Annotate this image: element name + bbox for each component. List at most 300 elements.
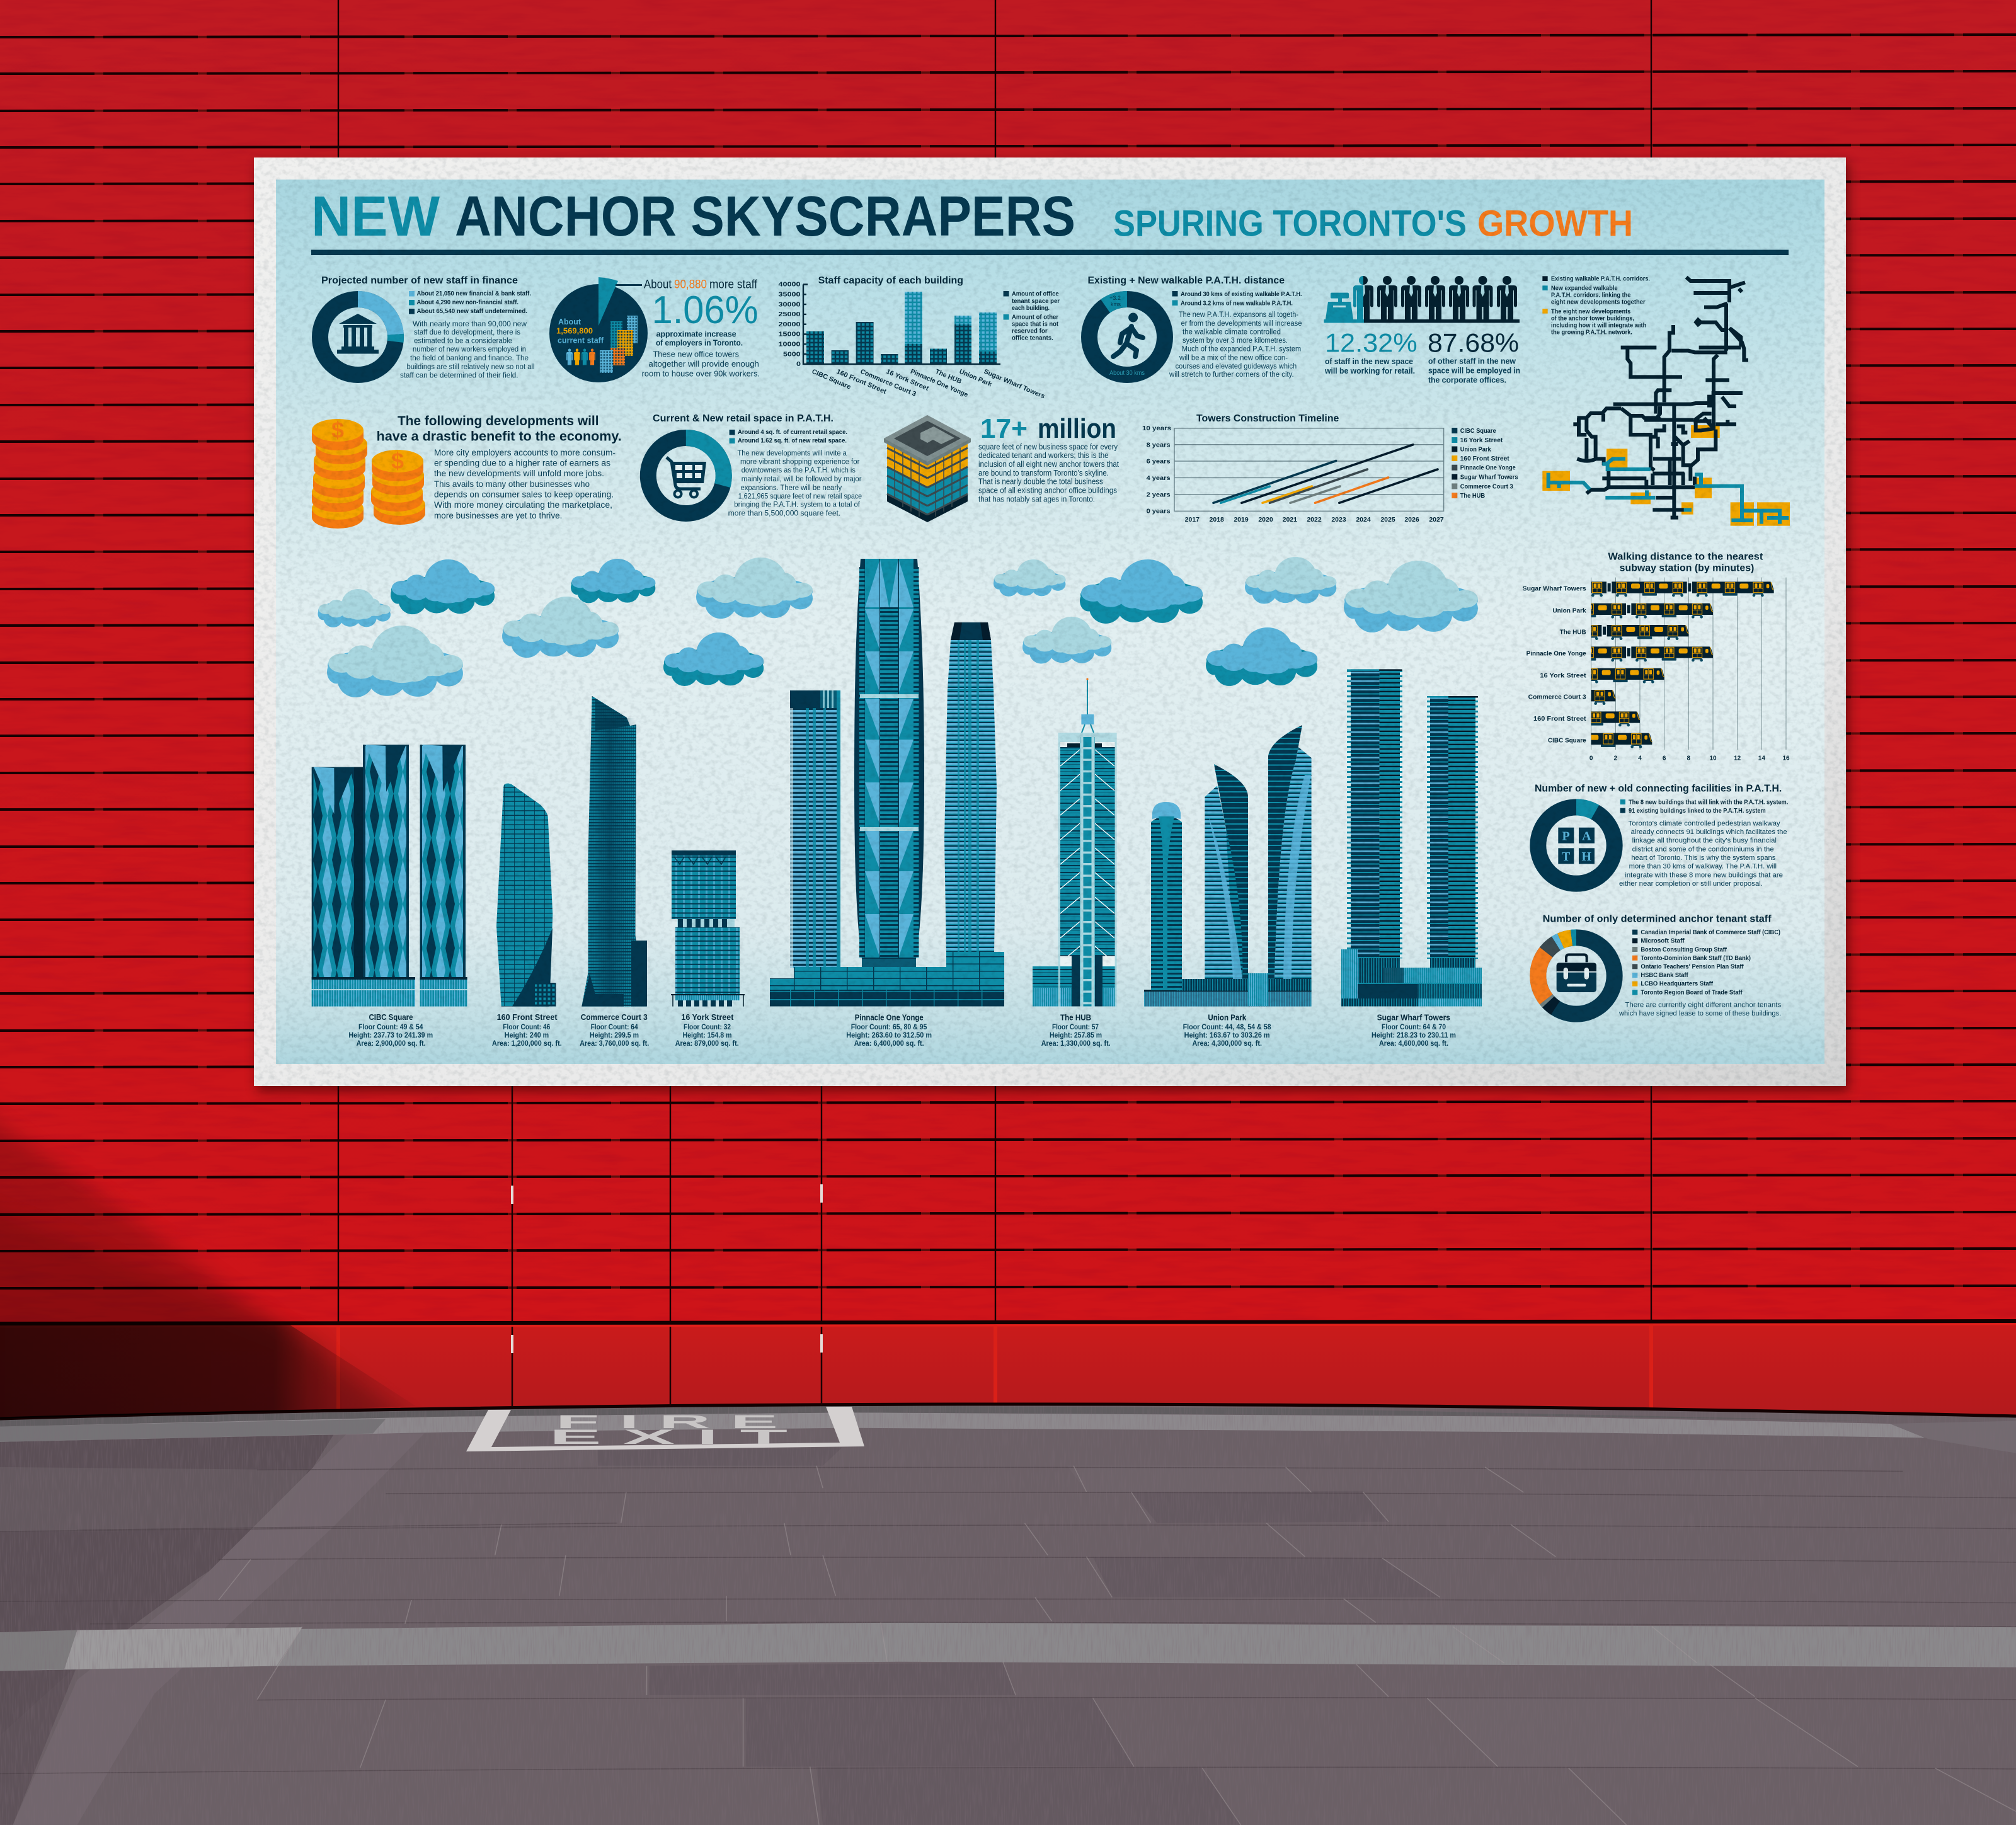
- callout: more staff: About: [644, 278, 672, 291]
- heading: connecting facilities: Number of new + old connecting facilities in P.A.T.H.: [1535, 784, 1782, 794]
- panel: walkable PATH distance: kms: [1111, 301, 1121, 307]
- row labels: Sugar Wharf Towers: [1523, 586, 1586, 593]
- legend: walkable: [1172, 290, 1302, 307]
- legend: capacity: space that is not: [1012, 321, 1059, 328]
- caption: Union Park: Height: 163.67 to 303.26 m: [1184, 1031, 1270, 1039]
- x axis labels: 2022: [1307, 516, 1322, 523]
- panel: retail vs corporate staff: [1324, 276, 1520, 385]
- caption: Pinnacle One Yonge: Area: 6,400,000 sq. ft.: [854, 1039, 924, 1048]
- bars: [806, 292, 997, 363]
- axis labels: 20000: [779, 321, 801, 328]
- axis labels: 15000: [779, 331, 801, 338]
- x axis labels: 6: [1663, 755, 1666, 762]
- tower: Sugar Wharf Towers: [1341, 669, 1482, 1007]
- text block: walkable: system by over 3 more kilometres.: [1183, 337, 1288, 345]
- left tower: [1347, 669, 1402, 958]
- panel: economy benefit: [312, 414, 622, 529]
- text block: retail: [728, 450, 862, 518]
- tower: Commerce Court 3: [581, 696, 647, 1007]
- heading: capacity: Staff capacity of each building: [818, 275, 963, 286]
- caption: CIBC Square: Floor Count: 49 & 54: [358, 1022, 423, 1031]
- caption: 160 Front Street: Area: 1,200,000 sq. ft.: [492, 1039, 562, 1048]
- text block: business space: square feet of new business space for every: [978, 442, 1118, 451]
- clouds: [318, 557, 1478, 697]
- legend: retail: Around 4 sq. ft. of current retail space.: [738, 428, 847, 436]
- icon: coin stacks: $: [331, 417, 344, 443]
- stat: 87.68%: 87.68%: [1428, 328, 1519, 358]
- label: current staff: 1,569,800: [556, 326, 593, 335]
- text block: PATH: linkage all throughout the city's busy financial: [1632, 837, 1777, 845]
- panel: 1.06% employer increase: These new office towers: [653, 350, 739, 359]
- text block: PATH: [1619, 820, 1787, 888]
- title: NEW: [311, 185, 440, 248]
- text block: walkable: will be a mix of the new office con-: [1179, 354, 1288, 362]
- caption: Pinnacle One Yonge: Pinnacle One Yonge: [855, 1012, 924, 1022]
- poster paper border: [254, 157, 1846, 1086]
- x axis labels: 2026: [1404, 516, 1419, 523]
- caption: Sugar Wharf Towers: [1372, 1013, 1456, 1048]
- heading: projected staff: Projected number of new staff in finance: [321, 275, 518, 286]
- row labels: 16 York Street: [1540, 672, 1587, 679]
- rotated building labels: Pinnacle One Yonge: [909, 368, 969, 399]
- text block: economy: depends on consumer sales to keep operating.: [434, 490, 614, 500]
- x axis labels: 2025: [1380, 516, 1395, 523]
- axis labels: 40000: [779, 282, 801, 289]
- text block: retail: The new developments will invite a: [737, 450, 847, 457]
- rotated building labels: Union Park: [958, 368, 993, 388]
- caption: The HUB: Height: 257.85 m: [1050, 1031, 1102, 1039]
- caption: CIBC Square: CIBC Square: [369, 1012, 413, 1022]
- x axis labels: 8: [1687, 755, 1691, 762]
- x axis labels: 2020: [1258, 516, 1273, 523]
- text block: finance: the field of banking and finance. The: [410, 355, 529, 362]
- right tower: [1268, 725, 1312, 979]
- caption: 16 York Street: Height: 154.8 m: [683, 1031, 732, 1039]
- caption: Commerce Court 3: Commerce Court 3: [581, 1012, 648, 1022]
- legend: connecting facilities: The 8 new buildings that will link with the P.A.T.H. system.: [1629, 799, 1789, 806]
- legend: walkable: Around 30 kms of existing walkable P.A.T.H.: [1181, 290, 1302, 298]
- caption: Sugar Wharf Towers: Floor Count: 64 & 70: [1382, 1022, 1446, 1031]
- podium: [770, 952, 1004, 1007]
- timeline lines: [1213, 445, 1438, 503]
- text block: finance: number of new workers employed in: [413, 346, 526, 353]
- x axis labels: 2018: [1210, 516, 1224, 523]
- row labels: Union Park: [1552, 607, 1586, 614]
- donut: retail: [648, 438, 724, 513]
- text block: retail: expansions. There will be nearly: [741, 484, 842, 492]
- legend: map: New expanded walkable: [1551, 285, 1618, 292]
- legend: finance staff: About 4,290 new non-financial staff.: [417, 299, 518, 306]
- heading: walkable: Existing + New walkable P.A.T.H. distance: [1087, 275, 1285, 286]
- text block: retail: mainly retail, will be followed by major: [742, 476, 862, 483]
- x axis labels: 2024: [1356, 516, 1371, 523]
- icon: isometric office building: [884, 415, 971, 522]
- heading: economy: have a drastic benefit to the economy.: [377, 430, 622, 443]
- chart: walking distance trains: [1433, 551, 1790, 762]
- x axis labels: 10: [1709, 755, 1717, 762]
- text block: PATH: heart of Toronto. This is why the system spans: [1631, 854, 1776, 862]
- legend: walkable: Around 3.2 kms of new walkable P.A.T.H.: [1181, 299, 1293, 307]
- text block: PATH: district and some of the condominiums in the: [1632, 845, 1774, 853]
- legend: finance staff: About 65,540 new staff undetermined.: [417, 307, 527, 315]
- rotated building labels: [811, 368, 1046, 400]
- bar chart: staff capacity: [779, 275, 1060, 400]
- fire exit floor marking: [466, 1407, 864, 1451]
- x axis labels: [1589, 755, 1790, 762]
- fire exit floor marking: E X I T: [549, 1426, 789, 1448]
- captions: staff split: [1324, 357, 1520, 385]
- callout: more staff: more staff: [709, 278, 758, 291]
- text block: employers: approximate increase: [656, 329, 736, 339]
- label: current staff: About: [558, 317, 581, 326]
- icon: PATH blocks: [1558, 828, 1595, 864]
- legend: timeline: Union Park: [1460, 446, 1491, 454]
- caption: Union Park: Area: 4,300,000 sq. ft.: [1192, 1039, 1262, 1048]
- legend: capacity: Amount of office: [1012, 291, 1059, 298]
- caption: 160 Front Street: [492, 1012, 562, 1048]
- panel: 17+ million: [884, 413, 1119, 522]
- text block: anchor tenants: [1618, 1002, 1782, 1017]
- pie: current staff: [549, 284, 648, 382]
- tower: 160 Front Street: [496, 784, 556, 1007]
- icon: bank: [337, 314, 379, 354]
- donut: connecting facilities: [1538, 807, 1615, 884]
- heading: economy: [377, 414, 622, 443]
- donut: walkable distance: [1074, 284, 1180, 390]
- podium: [1341, 949, 1482, 1007]
- heading: walking distance: Walking distance to the nearest: [1608, 551, 1763, 562]
- centre tower: [854, 559, 924, 968]
- label: current staff: [556, 317, 604, 345]
- legend: map: The eight new developments: [1551, 308, 1631, 315]
- captions: staff split: of staff in the new space: [1325, 357, 1413, 366]
- callout: more staff: 90,880: [674, 278, 707, 291]
- legend: anchor tenants: Canadian Imperial Bank of Commerce Staff (CIBC): [1641, 929, 1780, 936]
- legend: capacity: Amount of other: [1012, 314, 1058, 321]
- text block: anchor tenants: There are currently eight different anchor tenants: [1625, 1002, 1782, 1009]
- text block: business space: space of all existing anchor office buildings: [978, 486, 1117, 495]
- panel: PATH map: [1542, 276, 1790, 526]
- x axis labels: 4: [1638, 755, 1642, 762]
- heading: walking distance: [1608, 551, 1763, 574]
- poster drop shadow: [257, 163, 1848, 1091]
- text block: walkable: Much of the expanded P.A.T.H. system: [1182, 345, 1301, 353]
- text block: PATH: already connects 91 buildings which facilitates the: [1631, 828, 1787, 836]
- donut: anchor tenants: [1522, 922, 1630, 1030]
- rotated building labels: Sugar Wharf Towers: [983, 368, 1046, 400]
- text block: walkable: [1169, 311, 1302, 379]
- caption: Sugar Wharf Towers: Area: 4,600,000 sq. ft.: [1379, 1039, 1448, 1048]
- panel: 1.06% employer increase: room to house over 90k workers.: [642, 369, 760, 378]
- legend: timeline: [1452, 428, 1518, 500]
- axis labels: 35000: [779, 291, 801, 299]
- axis labels: 25000: [779, 311, 801, 318]
- icon: briefcase: [1557, 954, 1596, 992]
- row labels: The HUB: [1560, 629, 1586, 636]
- text block: finance: With nearly more than 90,000 new: [413, 321, 527, 328]
- poster: [254, 157, 1846, 1086]
- rotated building labels: Commerce Court 3: [859, 368, 917, 398]
- subtitle: SPURING TORONTO'S: [1113, 203, 1467, 244]
- legend: anchor tenants: HSBC Bank Staff: [1641, 972, 1688, 979]
- caption: 16 York Street: [675, 1012, 739, 1048]
- caption: Union Park: [1183, 1013, 1271, 1048]
- y axis labels: 4 years: [1147, 474, 1171, 482]
- legend: timeline: 16 York Street: [1460, 437, 1503, 444]
- text block: business space: inclusion of all eight new anchor towers that: [978, 460, 1119, 469]
- left tower: [1151, 802, 1182, 990]
- legend: map: eight new developments together: [1551, 299, 1646, 306]
- caption: Commerce Court 3: Area: 3,760,000 sq. ft.: [580, 1039, 649, 1048]
- x axis labels: 0: [1589, 755, 1593, 762]
- text block: retail: bringing the P.A.T.H. system to a total of: [734, 501, 861, 509]
- x axis labels: 2021: [1283, 516, 1297, 523]
- legend: capacity: tenant space per: [1012, 298, 1060, 305]
- legend: finance staff: About 21,050 new financial & bank staff.: [417, 290, 531, 297]
- legend: anchor tenants: [1632, 929, 1780, 997]
- heading: timeline: Towers Construction Timeline: [1196, 413, 1339, 424]
- panel: connecting facilities and anchor tenants: [1522, 784, 1789, 1030]
- legend: timeline: Pinnacle One Yonge: [1460, 465, 1516, 472]
- tower captions: [348, 1012, 1456, 1048]
- x axis labels: 2023: [1331, 516, 1346, 523]
- label: current staff: current staff: [558, 335, 604, 345]
- tower: CIBC Square: [312, 745, 467, 1007]
- legend: capacity: reserved for: [1012, 328, 1048, 335]
- icon: PATH blocks: T: [1562, 850, 1571, 864]
- panel: retail space: [648, 413, 862, 518]
- panel: walkable PATH distance: About 30 kms: [1109, 370, 1145, 377]
- rotated building labels: The HUB: [934, 368, 963, 386]
- legend: timeline: CIBC Square: [1460, 428, 1496, 435]
- map: new development sites: [1542, 425, 1790, 526]
- chart: construction timeline: [1142, 413, 1518, 523]
- captions: staff split: space will be employed in: [1428, 367, 1520, 375]
- legend: capacity: office tenants.: [1012, 335, 1053, 342]
- x axis labels: 2019: [1234, 516, 1249, 523]
- caption: Sugar Wharf Towers: Height: 218.23 to 230.11 m: [1372, 1031, 1456, 1039]
- tower: The HUB: [1033, 678, 1117, 1007]
- text block: retail: more vibrant shopping experience for: [740, 459, 860, 466]
- text block: economy: This avails to many other businesses who: [434, 479, 590, 489]
- legend: capacity: each building.: [1012, 305, 1050, 312]
- legend: anchor tenants: Toronto-Dominion Bank Staff (TD Bank): [1641, 955, 1751, 962]
- panel: 1.06% employer increase: altogether will provide enough: [649, 359, 759, 369]
- icon: city and people: [566, 316, 638, 373]
- x axis labels: 2027: [1429, 516, 1444, 523]
- heading: anchor tenant staff: Number of only determined anchor tenant staff: [1543, 913, 1772, 924]
- text block: economy: [434, 448, 616, 520]
- icon: PATH blocks: P: [1562, 829, 1570, 843]
- caption: Commerce Court 3: Height: 299.5 m: [590, 1031, 639, 1039]
- caption: Pinnacle One Yonge: Height: 263.60 to 312.50 m: [846, 1031, 932, 1039]
- icon: coin stacks: [312, 417, 425, 529]
- legend: retail: [730, 428, 847, 445]
- caption: Sugar Wharf Towers: Sugar Wharf Towers: [1377, 1013, 1450, 1022]
- stat: 17+ million: 17+: [980, 413, 1028, 444]
- icon: PATH blocks: A: [1582, 829, 1591, 843]
- callout: more staff: [644, 278, 758, 291]
- x axis labels: 2: [1614, 755, 1618, 762]
- legend: anchor tenants: Boston Consulting Group Staff: [1641, 946, 1727, 953]
- caption: The HUB: Floor Count: 57: [1052, 1022, 1099, 1031]
- x axis labels: 16: [1782, 755, 1790, 762]
- row labels: CIBC Square: [1548, 737, 1586, 744]
- captions: staff split: of other staff in the new: [1428, 357, 1516, 365]
- icon: walking person: [1113, 312, 1143, 357]
- map: new corridors: [1549, 459, 1789, 524]
- y axis labels: [1142, 425, 1171, 515]
- captions: staff split: will be working for retail.: [1324, 367, 1415, 375]
- heading: retail: Current & New retail space in P.A.T.H.: [653, 413, 833, 424]
- stat: 1.06%: 1.06%: [652, 289, 759, 332]
- text block: economy: More city employers accounts to more consum-: [434, 448, 616, 457]
- text block: retail: downtowners as the P.A.T.H. which is: [742, 467, 856, 474]
- text block: business space: that has notably sat ages in Toronto.: [978, 495, 1095, 503]
- y axis labels: 8 years: [1147, 441, 1171, 449]
- donut: finance staff: [318, 297, 398, 377]
- legend: map: of the anchor tower buildings,: [1551, 315, 1634, 322]
- rotated building labels: CIBC Square: [811, 368, 852, 391]
- right tower: [944, 622, 997, 952]
- axis labels: 0: [796, 361, 801, 368]
- legend: map: P.A.T.H. corridors. linking the: [1551, 292, 1631, 299]
- background: pavement: [0, 1399, 2016, 1825]
- text block: walkable: The new P.A.T.H. expansons all togeth-: [1179, 311, 1298, 319]
- legend: connecting facilities: [1620, 799, 1789, 815]
- text block: PATH: either near completion or still under proposal.: [1619, 880, 1763, 888]
- grid: [1591, 578, 1786, 750]
- text block: walkable: the walkable climate controlled: [1183, 329, 1281, 336]
- axis labels: 10000: [779, 341, 801, 348]
- legend: finance staff: [409, 290, 531, 315]
- poster blue field: [276, 180, 1824, 1064]
- fire exit floor marking: F I R E: [556, 1412, 778, 1433]
- text block: economy: more businesses are yet to thrive.: [434, 511, 562, 520]
- caption: 160 Front Street: Floor Count: 46: [503, 1022, 551, 1031]
- caption: Pinnacle One Yonge: Floor Count: 65, 80 & 95: [851, 1022, 927, 1031]
- axis labels: 30000: [779, 301, 801, 308]
- caption: CIBC Square: Height: 237.73 to 241.39 m: [348, 1031, 433, 1039]
- wall shadow: [0, 1114, 416, 1419]
- legend: anchor tenants: Microsoft Staff: [1641, 938, 1685, 945]
- caption: The HUB: The HUB: [1060, 1013, 1091, 1022]
- icon: cash register: [1324, 293, 1365, 323]
- text block: walkable: courses and elevated guideways which: [1176, 363, 1297, 370]
- map: existing corridors: [1573, 277, 1748, 518]
- rotated building labels: 16 York Street: [885, 368, 930, 392]
- caption: The HUB: Area: 1,330,000 sq. ft.: [1041, 1039, 1111, 1048]
- icon: shopping cart: [667, 457, 706, 498]
- captions: staff split: the corporate offices.: [1428, 376, 1506, 385]
- text block: retail: 1,621,965 square feet of new retail space: [738, 493, 862, 501]
- stat: 12.32%: 12.32%: [1325, 328, 1418, 358]
- row labels: Pinnacle One Yonge: [1526, 651, 1586, 658]
- x axis labels: 14: [1758, 755, 1765, 762]
- text block: finance: staff can be determined of their field.: [400, 372, 518, 379]
- text block: employers: [656, 329, 743, 347]
- x axis labels: 12: [1734, 755, 1741, 762]
- text block: walkable: will stretch to further corners of the city.: [1169, 371, 1294, 379]
- legend: map: the growing P.A.T.H. network.: [1551, 329, 1632, 336]
- y axis labels: 6 years: [1147, 457, 1171, 465]
- caption: 160 Front Street: Height: 240 m: [505, 1031, 549, 1039]
- caption: The HUB: [1041, 1013, 1111, 1048]
- legend: anchor tenants: LCBO Headquarters Staff: [1641, 981, 1714, 988]
- text block: economy: er spending due to a higher rate of earners as: [434, 458, 610, 467]
- text block: finance: buildings are still relatively new so not all: [407, 363, 534, 371]
- text block: finance: estimated to be a considerable: [414, 338, 512, 345]
- right tower: [1427, 696, 1478, 959]
- icon: row of staff: [1353, 276, 1520, 323]
- stat: 17+ million: [980, 413, 1116, 444]
- legend: map: Existing walkable P.A.T.H. corridors.: [1551, 276, 1650, 283]
- legend: anchor tenants: Toronto Region Board of Trade Staff: [1641, 990, 1743, 997]
- heading: walking distance: subway station (by minutes): [1620, 563, 1754, 574]
- text block: finance: [400, 321, 534, 379]
- rotated building labels: 160 Front Street: [835, 368, 888, 396]
- text block: business space: are bound to transform Toronto's skyline.: [978, 469, 1109, 478]
- middle tower: [1205, 764, 1248, 979]
- tower: Union Park: [1144, 725, 1312, 1007]
- caption: Commerce Court 3: [580, 1012, 649, 1048]
- panel: 1.06% employer increase: [549, 277, 760, 382]
- row labels: Commerce Court 3: [1528, 694, 1586, 701]
- text block: walkable: er from the developments will increase: [1181, 320, 1302, 328]
- legend: map: including how it will integrate with: [1551, 322, 1646, 329]
- text block: business space: That is nearly double the total business: [978, 478, 1103, 486]
- icon: PATH blocks: H: [1582, 850, 1592, 864]
- legend: anchor tenants: Ontario Teachers' Pension Plan Staff: [1641, 963, 1744, 970]
- caption: Pinnacle One Yonge: [846, 1012, 932, 1048]
- stat: 17+ million: million: [1038, 413, 1116, 444]
- title: ANCHOR SKYSCRAPERS: [455, 185, 1075, 248]
- text block: employers: of employers in Toronto.: [656, 338, 743, 347]
- legend: retail: Around 1.62 sq. ft. of new retail space.: [738, 437, 847, 445]
- background: red panelled wall: [0, 0, 2016, 1449]
- y axis labels: 10 years: [1142, 425, 1171, 432]
- panel: new staff in finance: [318, 275, 534, 379]
- caption: 16 York Street: Floor Count: 32: [684, 1022, 731, 1031]
- heading: economy: The following developments will: [398, 414, 598, 428]
- legend: capacity: [1004, 291, 1060, 342]
- text block: anchor tenants: which have signed lease to some of these buildings.: [1618, 1010, 1781, 1017]
- text block: retail: more than 5,500,000 square feet.: [728, 510, 840, 518]
- text block: economy: the new developments will unfold more jobs.: [434, 469, 604, 478]
- y axis labels: 2 years: [1147, 491, 1171, 498]
- axis labels: 5000: [783, 351, 801, 358]
- legend: connecting facilities: 91 existing buildings linked to the P.A.T.H. system: [1629, 808, 1766, 815]
- train bars: [1433, 581, 1774, 748]
- row labels: [1523, 586, 1587, 744]
- legend: timeline: Commerce Court 3: [1460, 483, 1513, 490]
- caption: 16 York Street: Area: 879,000 sq. ft.: [675, 1039, 739, 1048]
- panel: walkable PATH distance: [1074, 275, 1302, 390]
- caption: CIBC Square: Area: 2,900,000 sq. ft.: [357, 1039, 426, 1048]
- caption: CIBC Square: [348, 1012, 433, 1048]
- text block: PATH: integrate with these 8 more new buildings that are: [1625, 872, 1783, 879]
- y axis labels: 0 years: [1147, 508, 1171, 515]
- caption: 160 Front Street: 160 Front Street: [497, 1012, 558, 1022]
- caption: Union Park: Floor Count: 44, 48, 54 & 58: [1183, 1022, 1271, 1031]
- left tower: [790, 690, 840, 968]
- caption: Commerce Court 3: Floor Count: 64: [591, 1022, 638, 1031]
- x axis labels: [1185, 516, 1444, 523]
- text block: business space: dedicated tenant and workers; this is the: [978, 451, 1109, 460]
- legend: timeline: The HUB: [1460, 493, 1485, 500]
- row labels: 160 Front Street: [1533, 716, 1587, 723]
- legend: timeline: 160 Front Street: [1460, 455, 1509, 462]
